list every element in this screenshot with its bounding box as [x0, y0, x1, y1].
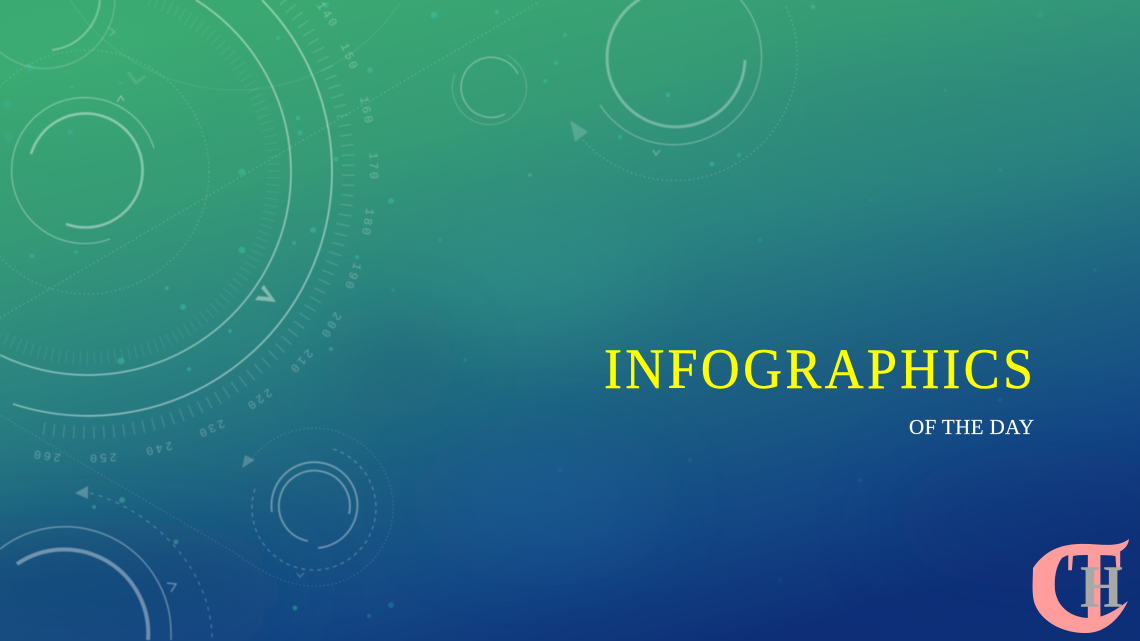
dial scale numbers: 220 — [242, 385, 275, 414]
ring group bottom left — [0, 486, 212, 640]
dial scale numbers: 210 — [285, 346, 316, 377]
faint chevron — [128, 72, 145, 83]
dial scale numbers: 200 — [316, 309, 344, 342]
arrow head — [75, 486, 88, 499]
faint sweep arc — [70, 0, 400, 90]
dotted diagonal line — [0, 3, 537, 318]
dial inner ticks — [0, 0, 274, 358]
dial outer ticks — [43, 0, 349, 432]
ring group bottom centre — [0, 415, 393, 586]
logo — [1033, 522, 1129, 641]
ring group top centre — [570, 0, 797, 181]
dial scale numbers: 260 — [30, 446, 62, 464]
dotted circle — [0, 50, 209, 294]
dial scale numbers: 160 — [356, 95, 376, 127]
dial scale numbers: 250 — [87, 449, 117, 465]
dial inner ring — [0, 0, 291, 375]
dial scale numbers: 150 — [337, 41, 361, 74]
dial scale numbers: 230 — [194, 415, 227, 441]
ring group left — [12, 96, 154, 244]
subtitle: OF THE DAY — [909, 415, 1034, 439]
small ring group — [452, 55, 526, 125]
arrow head — [570, 120, 588, 142]
dial scale numbers: 240 — [142, 438, 174, 458]
dial scale numbers — [30, 0, 380, 465]
arrow head — [242, 455, 255, 468]
logo: H — [1080, 554, 1123, 620]
big dial graphic — [0, 0, 537, 432]
dial scale numbers: 190 — [340, 260, 364, 293]
dial chevron — [255, 285, 276, 302]
dial outer ring — [13, 0, 332, 416]
dial scale numbers: 170 — [366, 152, 380, 182]
title: INFOGRAPHICS — [604, 338, 1033, 401]
corner circle top-left — [0, 0, 115, 68]
dial scale numbers: 140 — [313, 0, 341, 32]
dial scale numbers: 180 — [358, 207, 376, 239]
